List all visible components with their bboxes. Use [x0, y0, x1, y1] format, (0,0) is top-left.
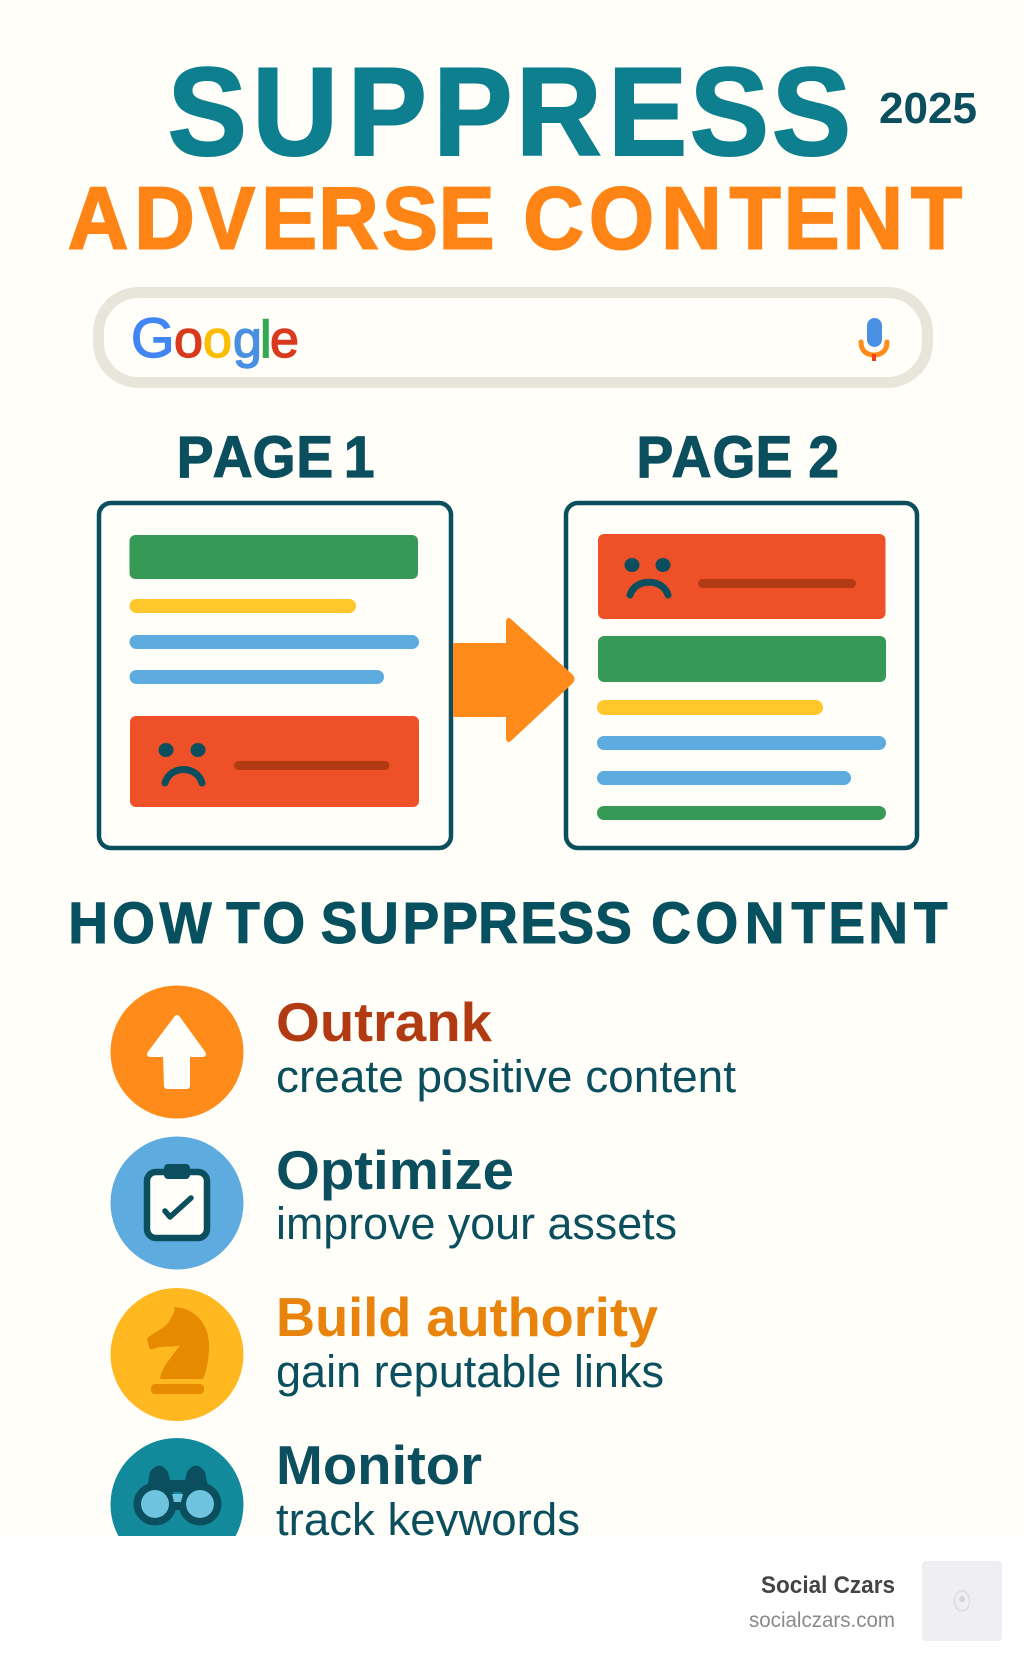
- result: blue line: [597, 736, 886, 750]
- footer: [0, 1536, 1024, 1666]
- icon: binoculars: [110, 1438, 244, 1571]
- step description: gain reputable links: [276, 1346, 664, 1397]
- step: build authority: [110, 1286, 664, 1421]
- result: blue short line: [130, 670, 384, 684]
- heading: page 2: PAGE 2: [637, 425, 839, 489]
- panel: page 1 results: [99, 503, 451, 848]
- google logo: o: [174, 311, 203, 369]
- step title: Outrank: [276, 991, 492, 1053]
- google logo: G: [131, 306, 175, 369]
- result: green top: [130, 535, 418, 579]
- step: monitor: [110, 1434, 580, 1571]
- year label: 2025: [879, 84, 977, 133]
- google logo: e: [270, 311, 299, 369]
- brand name: Social Czars: [761, 1572, 895, 1599]
- logo tile: [922, 1561, 1002, 1641]
- google logo: l: [260, 311, 272, 369]
- step title: Monitor: [276, 1434, 482, 1496]
- result: blue short line: [597, 771, 851, 785]
- heading: how to suppress content: HOW TO SUPPRESS CONTENT: [68, 891, 948, 955]
- search bar: [98, 292, 928, 382]
- google logo: g: [233, 311, 262, 369]
- step description: create positive content: [276, 1051, 737, 1102]
- arrow: page 1 to page 2: [453, 618, 574, 742]
- step description: track keywords: [276, 1494, 580, 1545]
- icon: up arrow: [110, 986, 244, 1118]
- result: yellow line: [130, 599, 356, 613]
- step title: Build authority: [276, 1286, 658, 1348]
- result: yellow line: [597, 700, 823, 715]
- step: outrank: [110, 986, 737, 1118]
- icon: microphone: [861, 318, 887, 361]
- result: blue line: [130, 635, 419, 649]
- icon: chess knight: [110, 1288, 244, 1421]
- result: green line: [597, 806, 886, 820]
- icon: clipboard check: [110, 1136, 244, 1270]
- heading: page 1: PAGE 1: [177, 425, 375, 489]
- step: optimize: [110, 1136, 677, 1270]
- brand url: socialczars.com: [749, 1609, 895, 1632]
- result: adverse red: [130, 716, 419, 807]
- step description: improve your assets: [276, 1198, 677, 1249]
- title: SUPPRESS: SUPPRESS: [168, 42, 851, 182]
- result: adverse red: [598, 534, 886, 619]
- panel: page 2 results: [566, 503, 917, 848]
- result: green: [598, 636, 886, 682]
- title: ADVERSE CONTENT: ADVERSE CONTENT: [68, 170, 962, 268]
- step title: Optimize: [276, 1139, 514, 1201]
- google logo: o: [203, 311, 232, 369]
